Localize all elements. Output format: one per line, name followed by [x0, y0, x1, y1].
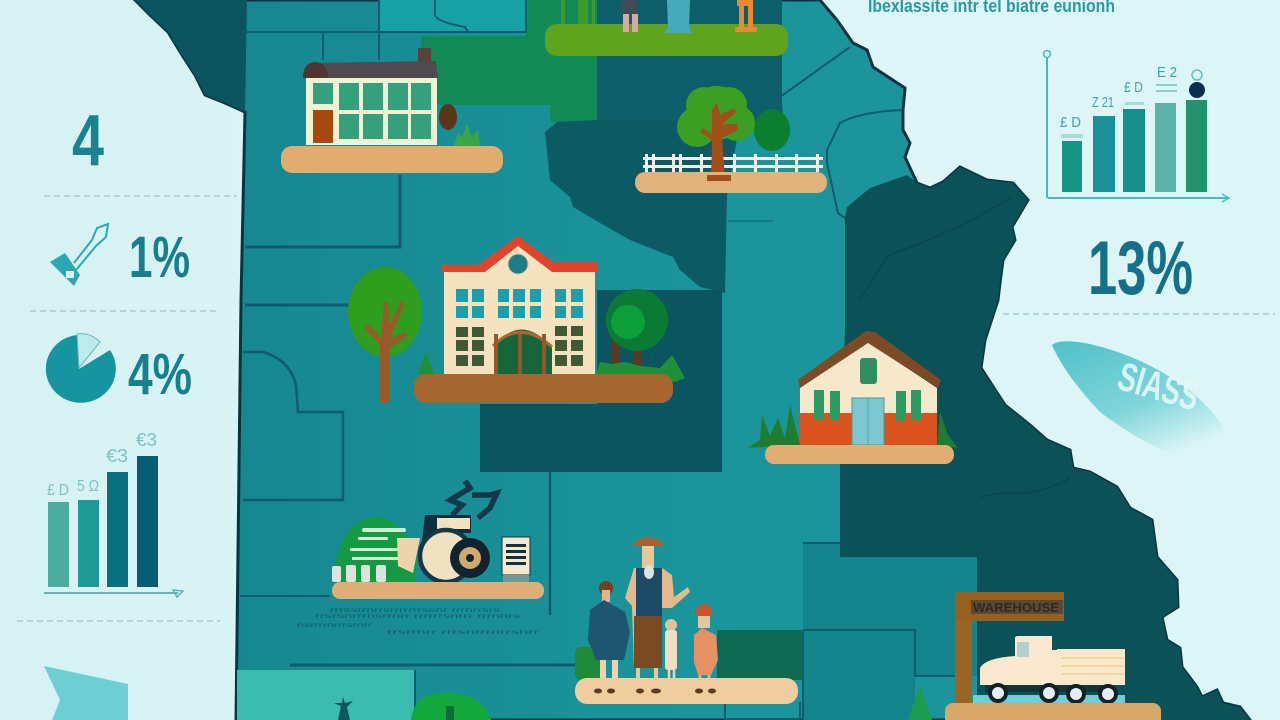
ground platform	[281, 146, 503, 173]
scene: tree and fence	[635, 86, 827, 193]
main tree canopy	[677, 86, 755, 147]
fence	[643, 154, 823, 172]
left stat column	[17, 101, 237, 720]
shrubs	[417, 352, 685, 382]
ground platform	[575, 678, 798, 704]
lower windows	[456, 326, 583, 366]
scene: delivery truck and sign	[945, 592, 1161, 720]
truck cargo	[1057, 649, 1125, 685]
upper windows	[456, 289, 583, 318]
grass platform	[545, 24, 788, 56]
stat: 13 percent: 13%	[1088, 226, 1193, 311]
caption text: rrrssrrnrrsrrrrrrrssnr rrrnrrsrs	[330, 608, 500, 614]
stat: 1 percent: 1%	[129, 225, 190, 290]
right trees	[606, 289, 668, 375]
girl	[665, 619, 677, 690]
green county	[421, 0, 597, 122]
bottles row	[332, 565, 386, 582]
right stat column	[1003, 50, 1275, 465]
bar chart: right: £ D	[1124, 79, 1143, 96]
arched entrance	[493, 330, 552, 374]
roof clock	[508, 254, 528, 274]
paper card	[397, 538, 420, 573]
scene: school building	[348, 236, 685, 403]
windows	[313, 83, 431, 139]
green dome tree	[411, 693, 491, 720]
door	[852, 398, 884, 445]
small grass bottom right	[908, 685, 932, 720]
light north region	[379, 0, 526, 32]
bar chart: right: £ D	[1060, 114, 1081, 131]
small wheel	[450, 538, 490, 578]
dark north-west region	[135, 0, 247, 112]
building	[306, 78, 437, 145]
roof dormer	[303, 62, 328, 78]
bar chart: left: €3	[136, 430, 157, 450]
caption text: rrsrrnrr rrrsnrrrnrrsnrr	[387, 630, 539, 636]
large wheel	[420, 530, 472, 582]
scene: delivery truck and sign: WAREHOUSE	[973, 600, 1059, 615]
stat: 4 percent: 4%	[128, 342, 192, 407]
dark central region	[545, 120, 740, 293]
ground platform	[332, 582, 544, 599]
windows	[814, 390, 921, 421]
ground platform	[414, 374, 673, 403]
palm silhouette	[334, 697, 353, 720]
tractor seat frame	[420, 515, 471, 575]
person legs: right	[735, 0, 757, 32]
bar chart: left	[44, 430, 183, 597]
green county beside family	[717, 630, 803, 680]
dark block under school	[480, 290, 722, 472]
scene: tractor and equipment	[297, 481, 544, 636]
scene: farming family	[575, 537, 798, 704]
ground platform	[945, 703, 1161, 720]
red roof	[441, 236, 598, 272]
scene: small tree bottom	[334, 693, 491, 720]
cream wall	[800, 342, 937, 413]
grass tuft	[454, 124, 480, 146]
stat: number 4: 4	[72, 101, 104, 181]
stacked crate	[502, 537, 530, 582]
brown roof	[798, 331, 941, 388]
caption text: rrsrsnrrrnsrrnrr rrrrrrsnrrr rrrnnrs	[315, 614, 520, 620]
ground platform	[765, 445, 954, 464]
background tree	[754, 109, 790, 151]
south county boxes	[803, 543, 977, 720]
gable emblem	[860, 358, 877, 384]
south-west light county	[237, 670, 415, 720]
green shrub behind	[575, 647, 605, 680]
person legs: middle	[664, 0, 692, 33]
top scene: people on grass	[545, 0, 788, 56]
caption text: nsrrrrnrrrsrnrr	[297, 623, 372, 629]
orange wall	[800, 413, 937, 445]
door	[313, 110, 333, 143]
green dome	[333, 517, 417, 582]
small state shape	[44, 666, 128, 720]
county boundary lines	[240, 0, 955, 720]
truck cab	[980, 636, 1057, 685]
road strip	[973, 695, 1125, 703]
scene: green-windowed house	[281, 48, 503, 173]
dark band behind top scene	[597, 0, 782, 125]
bar chart: left: €3	[106, 446, 128, 466]
bar chart: right	[1044, 50, 1229, 202]
bar chart: right: E 2	[1157, 64, 1177, 81]
ground platform	[635, 172, 827, 193]
sign label	[971, 600, 1063, 614]
left tree trunk	[364, 300, 407, 403]
icon: pie chart	[46, 334, 116, 403]
scene: farmhouse	[747, 331, 958, 464]
tree trunk	[700, 102, 738, 178]
lens-shaped state graphic: SIASS	[1113, 355, 1204, 419]
roof	[303, 61, 438, 78]
trunk	[446, 706, 454, 720]
caption text	[297, 608, 539, 636]
signboard	[955, 592, 1064, 621]
white field marks	[350, 528, 406, 560]
child	[694, 604, 718, 690]
chimney	[418, 48, 431, 64]
boy	[588, 581, 630, 684]
icon: pencil checkmark	[50, 224, 108, 286]
bar chart: right: Z 21	[1092, 94, 1114, 111]
shrubs	[747, 405, 958, 448]
tractor smoke scribble	[450, 481, 497, 518]
brown bush	[439, 104, 457, 130]
bar chart: left: 5 Ω	[77, 478, 99, 495]
farmer	[625, 537, 690, 688]
feet	[594, 688, 716, 694]
person legs: left	[622, 0, 638, 32]
east dark region	[840, 167, 1280, 720]
lens-shaped state graphic	[1052, 341, 1226, 465]
green trees trunks	[561, 0, 595, 24]
chassis	[985, 685, 1110, 692]
building wall	[444, 272, 595, 374]
bar chart: left: £ D	[47, 482, 69, 499]
signpost	[955, 592, 972, 704]
left tree canopy	[348, 267, 422, 357]
wheels	[990, 685, 1116, 702]
